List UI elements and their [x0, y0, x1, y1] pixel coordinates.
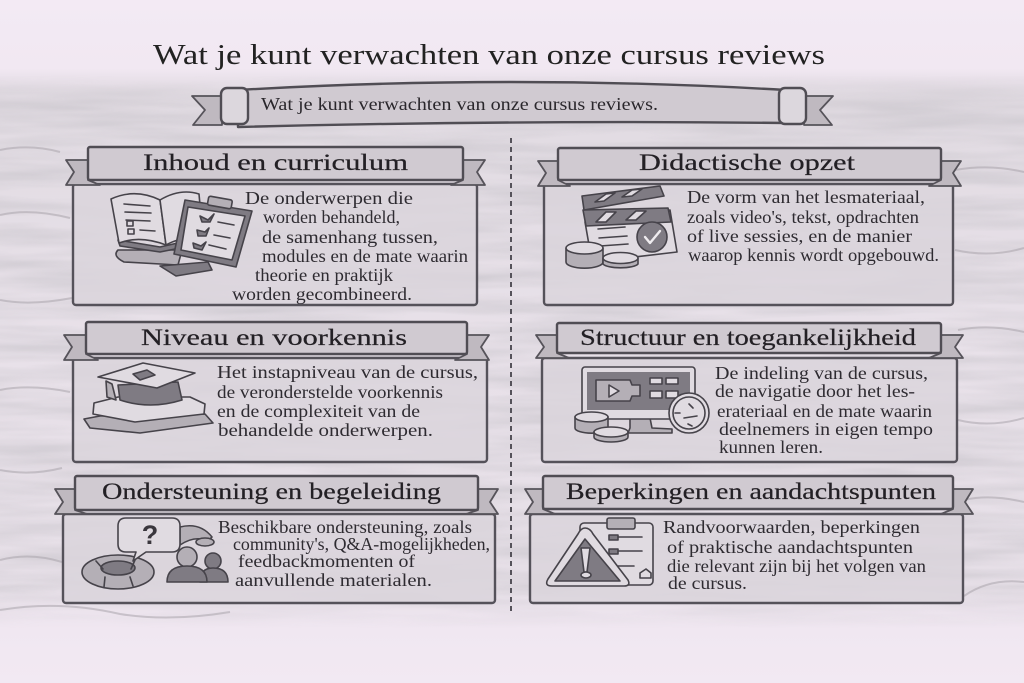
body text — [217, 362, 478, 440]
panel: Niveau en voorkennis — [64, 322, 489, 462]
body text: en de complexiteit van de — [217, 401, 420, 421]
panel: Ondersteuning en begeleiding — [55, 476, 498, 603]
main title: Wat je kunt verwachten van onze cursus reviews — [153, 39, 825, 71]
body text: aanvullende materialen. — [235, 570, 432, 590]
body text — [232, 188, 468, 304]
body text: zoals video's, tekst, opdrachten — [687, 207, 919, 227]
body text: kunnen leren. — [719, 437, 823, 457]
icon glyph: question mark: ? — [142, 520, 158, 550]
body text: theorie en praktijk — [255, 265, 393, 285]
icon: question bubble, lifebuoy and people — [82, 518, 228, 589]
body text: die relevant zijn bij het volgen van — [667, 556, 926, 576]
body text: de samenhang tussen, — [262, 227, 438, 247]
vertical dashed divider — [510, 138, 512, 612]
body text: modules en de mate waarin — [262, 246, 468, 266]
body text: De indeling van de cursus, — [715, 363, 928, 383]
icon: monitor, coins and clock — [575, 367, 709, 442]
body text — [715, 363, 933, 457]
heading: Inhoud en curriculum — [143, 150, 408, 175]
heading: Niveau en voorkennis — [141, 325, 407, 350]
panel: Inhoud en curriculum — [66, 147, 485, 305]
icon: graduation cap on books — [84, 363, 213, 433]
body text — [663, 517, 926, 593]
body text: de cursus. — [668, 573, 747, 593]
body text: worden gecombineerd. — [232, 284, 412, 304]
body text: Randvoorwaarden, beperkingen — [663, 517, 920, 537]
body text: of live sessies, en de manier — [687, 226, 912, 246]
body text: Het instapniveau van de cursus, — [217, 362, 478, 382]
body text: De vorm van het lesmateriaal, — [687, 187, 925, 207]
body text: waarop kennis wordt opgebouwd. — [688, 245, 939, 265]
heading: Structuur en toegankelijkheid — [580, 325, 917, 350]
panel: Beperkingen en aandachtspunten — [525, 476, 973, 603]
icon: book and clipboard — [111, 192, 252, 276]
body text: community's, Q&A-mogelijkheden, — [233, 534, 490, 554]
body text: of praktische aandachtspunten — [667, 537, 913, 557]
body text: behandelde onderwerpen. — [218, 420, 433, 440]
body text: worden behandeld, — [263, 207, 400, 227]
body text — [687, 187, 939, 265]
heading: Didactische opzet — [639, 150, 856, 175]
top banner — [192, 82, 833, 127]
body text: Beschikbare ondersteuning, zoals — [218, 517, 472, 537]
heading: Beperkingen en aandachtspunten — [566, 479, 937, 504]
body text: de navigatie door het les- — [715, 381, 915, 401]
body text — [218, 517, 490, 590]
panel: Structuur en toegankelijkheid — [536, 323, 963, 462]
body text: de veronderstelde voorkennis — [217, 382, 443, 402]
body text: erateriaal en de mate waarin — [717, 401, 932, 421]
banner subtitle: Wat je kunt verwachten van onze cursus reviews. — [261, 94, 658, 114]
body text: feedbackmomenten of — [238, 551, 415, 571]
body text: De onderwerpen die — [245, 188, 413, 208]
panel: Didactische opzet — [538, 148, 961, 305]
icon: clapperboard and coins — [566, 186, 677, 268]
icon: warning triangle and checklist — [547, 518, 653, 586]
body text: deelnemers in eigen tempo — [719, 419, 933, 439]
heading: Ondersteuning en begeleiding — [102, 479, 442, 504]
